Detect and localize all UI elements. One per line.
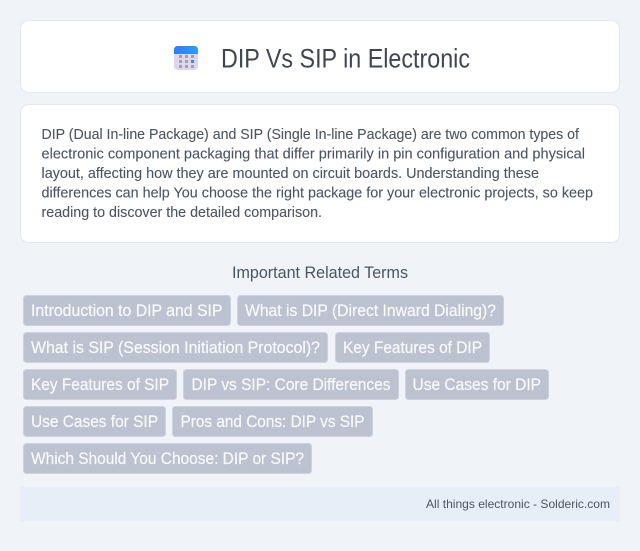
text block: introduction: differences can help You choose the right package for your electronic projects, so keep [42, 186, 593, 202]
footer [20, 487, 620, 521]
icon: calendar grid [174, 46, 198, 70]
text block: introduction: electronic component packaging that differ primarily in pin configuration and physical [42, 146, 585, 162]
tag: core differences: DIP vs SIP: Core Differences [192, 375, 390, 394]
tag: introduction: Introduction to DIP and SIP [31, 301, 222, 320]
panel: intro text card [20, 104, 620, 242]
text block: introduction: DIP (Dual In-line Package) and SIP (Single In-line Package) are two common types of [42, 127, 580, 143]
tag: key features of DIP: Key Features of DIP [343, 338, 482, 357]
panel: header card [20, 20, 620, 92]
tag: which to choose [24, 444, 312, 474]
tag: use cases for SIP: Use Cases for SIP [31, 412, 158, 431]
title: DIP Vs SIP in Electronic [221, 44, 470, 74]
tag: what is DIP: What is DIP (Direct Inward Dialing)? [245, 301, 496, 320]
tag: key features of SIP: Key Features of SIP [31, 375, 169, 394]
tag: use cases for DIP [406, 370, 548, 400]
tag: what is SIP [24, 332, 328, 362]
text block: introduction: reading to discover the detailed comparison. [42, 205, 322, 221]
tag: which to choose: Which Should You Choose: DIP or SIP? [31, 449, 304, 468]
tag: key features of DIP [336, 332, 490, 362]
tag: introduction [24, 296, 230, 326]
tag: core differences [184, 370, 398, 400]
tag: use cases for SIP [24, 406, 166, 436]
tag: pros and cons: Pros and Cons: DIP vs SIP [180, 412, 364, 431]
text block: introduction [42, 127, 593, 221]
tag: key features of SIP [24, 370, 176, 400]
tag: use cases for DIP: Use Cases for DIP [412, 375, 541, 394]
tag: pros and cons [172, 406, 372, 436]
footer: All things electronic - Solderic.com [426, 497, 610, 511]
heading: important related terms: Important Related Terms [232, 264, 408, 282]
text block: introduction: layout, affecting how they are mounted on circuit boards. Understanding these [42, 166, 539, 182]
tag list [24, 296, 548, 474]
tag: what is SIP: What is SIP (Session Initiation Protocol)? [31, 338, 320, 357]
tag: what is DIP [238, 296, 504, 326]
